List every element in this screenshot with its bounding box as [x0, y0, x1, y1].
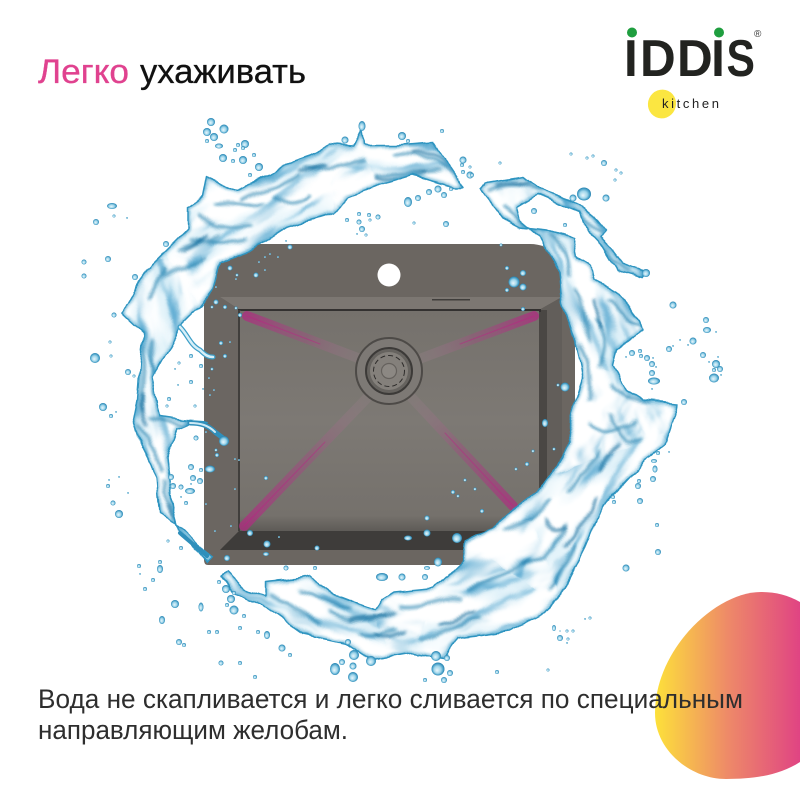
- faucet hole: [378, 264, 400, 286]
- gradient blob: [655, 592, 800, 779]
- sink rim and walls: [220, 297, 562, 550]
- title: [38, 53, 306, 91]
- blue liquid streak texture: [134, 144, 668, 658]
- soft inner edge glow: [122, 130, 679, 660]
- logo: IDDIS kitchen: S: [726, 30, 755, 88]
- sink deck: [204, 244, 575, 565]
- title: ухаживать: [140, 53, 306, 91]
- dark blue water streaks: [138, 154, 650, 640]
- pink drainage grooves: [244, 316, 534, 526]
- water edge lines: [122, 130, 679, 660]
- logo: IDDIS kitchen: kitchen: [662, 96, 719, 111]
- logo: IDDIS kitchen: IDDI: [624, 29, 725, 87]
- small water streams: [180, 327, 229, 556]
- white liquid highlights: [124, 134, 675, 658]
- sink bowl: [240, 311, 539, 531]
- body text: направляющим желобам.: [38, 715, 348, 745]
- water splash ring: [121, 130, 678, 660]
- logo: IDDIS kitchen: [624, 28, 762, 123]
- drain: [356, 338, 422, 404]
- deep blue accents: [141, 152, 620, 637]
- title: Легко: [38, 53, 129, 91]
- body text: Вода не скапливается и легко сливается по специальным: [38, 684, 743, 714]
- water droplets: [82, 118, 723, 683]
- body text: [38, 684, 743, 745]
- logo: IDDIS kitchen: ®: [754, 29, 762, 40]
- sink: [204, 244, 575, 565]
- water body: [122, 132, 676, 658]
